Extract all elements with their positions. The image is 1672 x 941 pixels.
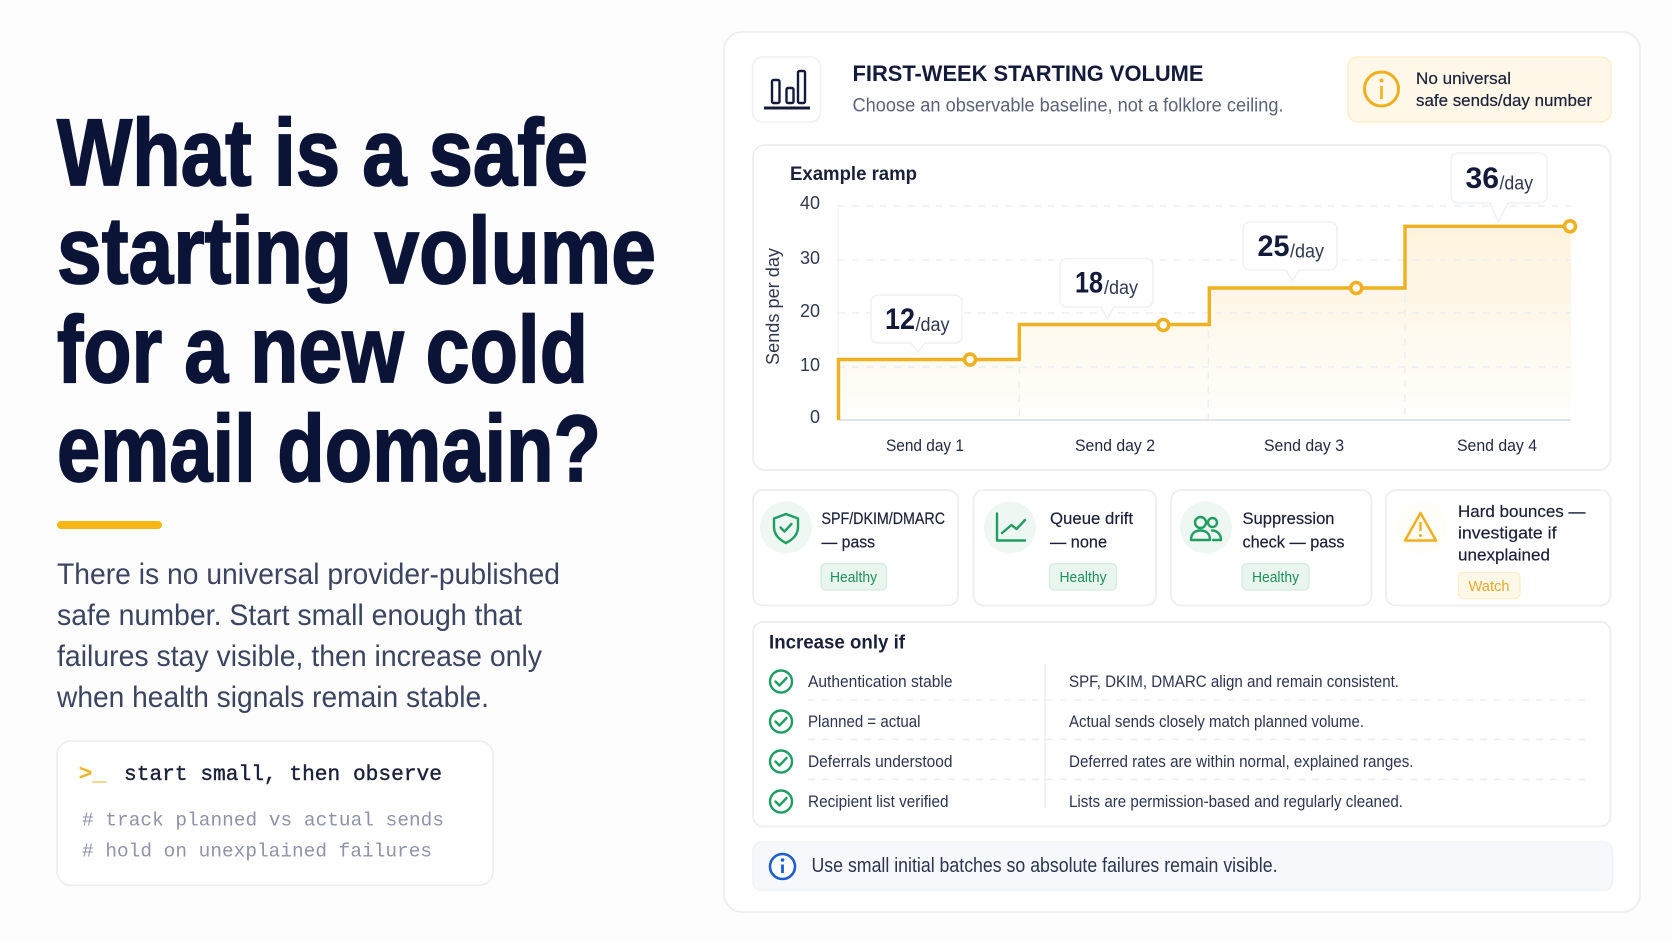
callout: 25 per day: 25 [1258,230,1290,263]
note text: Use small initial batches so absolute failures remain visible. [812,855,1278,877]
y axis labels [800,193,820,427]
callout: 36 per day: 36 [1466,162,1499,195]
callout text: No universal [1416,69,1511,88]
command text: start small, then observe [124,763,442,787]
status text: unexplained [1458,546,1550,564]
status text [1050,509,1133,552]
x axis labels: Send day 4 [1457,436,1537,455]
badge: healthy [1242,564,1309,590]
status text: — pass [822,532,875,552]
status text: Suppression [1242,509,1334,528]
callout: 12 per day: /day [916,315,950,336]
title: email domain? [57,396,601,502]
data points [964,221,1576,365]
chart heading: Example ramp [790,163,917,185]
y axis labels: 0 [810,407,820,427]
status text [822,509,945,552]
intro paragraph: failures stay visible, then increase only [57,640,542,673]
status text: SPF/DKIM/DMARC [822,509,945,528]
x axis labels [886,436,1537,455]
icon: info amber [1364,72,1398,106]
panel subheading: Choose an observable baseline, not a folklore ceiling. [852,96,1284,116]
code comments: # track planned vs actual sends [82,810,444,832]
status text [1458,502,1586,564]
y axis labels: 40 [800,193,820,213]
callout: 36 per day: /day [1500,174,1533,194]
title [57,100,656,502]
condition descriptions [1069,673,1414,811]
code comments [82,810,444,862]
panel: suppression check status [1171,490,1372,606]
code box [57,741,493,886]
status text: — none [1050,532,1107,552]
y axis labels: 20 [800,301,820,321]
callout: 18 per day: 18 [1075,266,1103,300]
x axis labels: Send day 2 [1075,436,1155,455]
badge: watch [1458,572,1520,598]
condition descriptions: SPF, DKIM, DMARC align and remain consistent. [1069,673,1399,691]
intro paragraph: when health signals remain stable. [56,681,489,714]
badge: healthy [1050,564,1116,590]
panel: first-week starting volume [724,32,1640,912]
code comments: # hold on unexplained failures [82,840,432,862]
callout: 12 per day [871,295,962,352]
status text: investigate if [1458,524,1557,542]
panel: increase only if [753,622,1610,826]
intro paragraph [56,558,560,714]
step line [838,226,1570,420]
status text: Hard bounces — [1458,502,1586,521]
intro paragraph: safe number. Start small enough that [57,599,523,632]
heading: Increase only if [769,632,905,654]
status text: check — pass [1242,532,1344,552]
divider lines [808,664,1590,808]
status text: Queue drift [1050,509,1133,528]
accent bar [57,521,162,529]
callout: 25 per day: /day [1290,242,1324,262]
icon: people [1180,502,1232,554]
badge: healthy: Healthy [1252,569,1299,586]
badge: healthy: Healthy [1060,569,1107,586]
panel heading: FIRST-WEEK STARTING VOLUME [852,61,1204,86]
title: What is a safe [57,100,588,206]
icon: line chart [984,502,1036,554]
panel: example ramp chart [753,145,1610,470]
y axis labels: 30 [800,248,820,268]
title: starting volume [57,198,656,304]
condition labels: Planned = actual [808,713,920,731]
callout: no universal number [1348,57,1611,122]
x axis labels: Send day 3 [1264,436,1344,455]
badge: healthy: Healthy [830,569,877,586]
icon: warning triangle [1394,502,1446,554]
callout: 18 per day: /day [1104,278,1138,299]
area under step line [838,226,1571,420]
condition labels: Recipient list verified [808,793,948,811]
icon: info blue [770,854,795,879]
condition descriptions: Actual sends closely match planned volume. [1069,713,1364,731]
callout: 36 per day [1451,153,1547,222]
condition labels: Authentication stable [808,673,952,691]
note bar [753,842,1612,890]
y axis labels: 10 [800,355,820,375]
title: for a new cold [57,297,588,403]
grid lines [838,206,1571,420]
badge: healthy [821,564,886,590]
panel: hard bounces status [1386,490,1610,606]
condition labels [808,673,952,811]
intro paragraph: There is no universal provider-published [57,558,560,591]
panel: SPF/DKIM/DMARC status [753,490,958,606]
condition labels: Deferrals understood [808,753,952,771]
badge: watch: Watch [1468,578,1510,595]
callout text [1416,69,1592,110]
x axis labels: Send day 1 [886,436,964,455]
callout: 12 per day: 12 [885,303,915,336]
condition descriptions: Lists are permission-based and regularly cleaned. [1069,793,1403,811]
terminal prompt: >_ [78,762,107,787]
status text [1242,509,1344,552]
callout: 25 per day [1243,222,1337,281]
panel: queue drift status [974,490,1156,606]
callout text: safe sends/day number [1416,91,1592,110]
icon: bar chart [752,57,820,122]
y axis title: Sends per day [763,248,783,365]
condition descriptions: Deferred rates are within normal, explained ranges. [1069,753,1414,771]
callout: 18 per day [1060,258,1153,319]
icon: shield check [760,502,812,554]
x axis line [838,419,1571,421]
icons: green checks [770,670,792,812]
